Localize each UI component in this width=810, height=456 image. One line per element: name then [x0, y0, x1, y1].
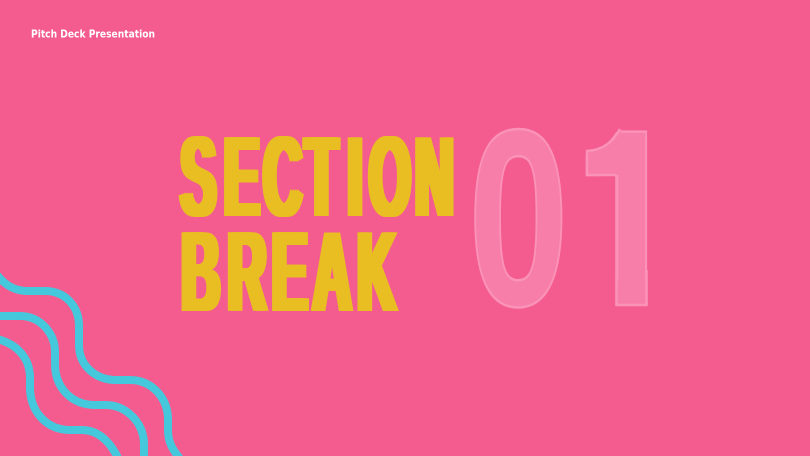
background, label, number and waves	[0, 30, 648, 456]
section number 01: 1	[569, 78, 685, 359]
deck label: Pitch Deck Presentation	[31, 28, 155, 40]
title line: section: SECTION	[177, 114, 450, 241]
decorative waves	[0, 275, 181, 456]
title line: break: BREAK	[178, 209, 393, 336]
section number 01	[474, 128, 648, 309]
section number 01: 0	[468, 77, 569, 359]
